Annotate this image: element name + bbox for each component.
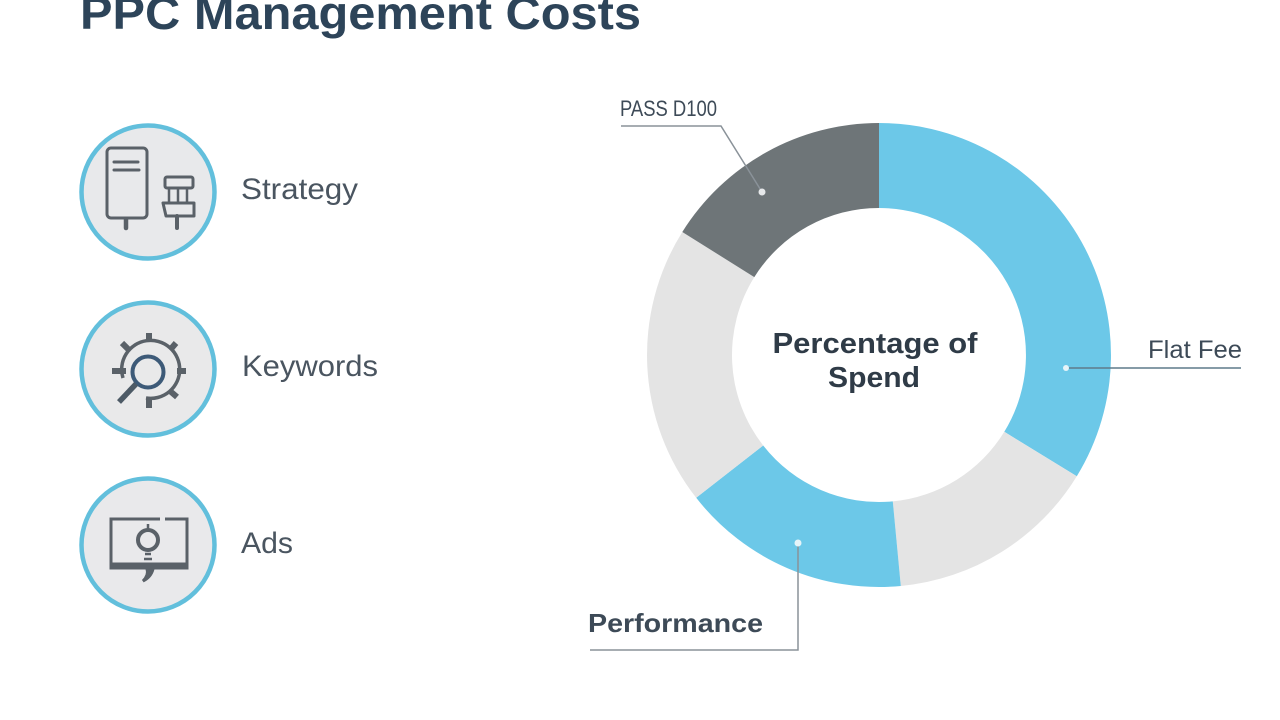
label: ads: Ads — [241, 527, 293, 560]
segment: dark grey — [682, 123, 879, 277]
icon: gear with magnifying glass — [82, 302, 214, 436]
callout: top label — [620, 96, 766, 196]
callout: flat fee: Flat Fee — [1148, 336, 1242, 364]
item: keywords — [82, 302, 378, 436]
callout: top label: PASS D100 — [620, 96, 717, 121]
item: ads — [82, 478, 293, 612]
icon: strategy document and tool — [82, 126, 214, 258]
callout: performance: Performance — [588, 608, 763, 638]
icon: monitor with lightbulb — [82, 478, 214, 612]
segment: flat fee — [879, 123, 1111, 476]
callout: flat fee — [1063, 336, 1242, 371]
segment: performance — [696, 446, 901, 587]
label: keywords: Keywords — [242, 350, 378, 383]
item: strategy — [82, 126, 358, 258]
donut chart — [647, 123, 1111, 587]
donut center label: Spend — [828, 362, 920, 394]
callout: performance — [588, 540, 802, 650]
segment: light grey lower right — [893, 432, 1077, 586]
segment: light grey left — [647, 232, 763, 498]
label: strategy: Strategy — [241, 173, 358, 206]
donut center label: Percentage of — [772, 328, 978, 360]
